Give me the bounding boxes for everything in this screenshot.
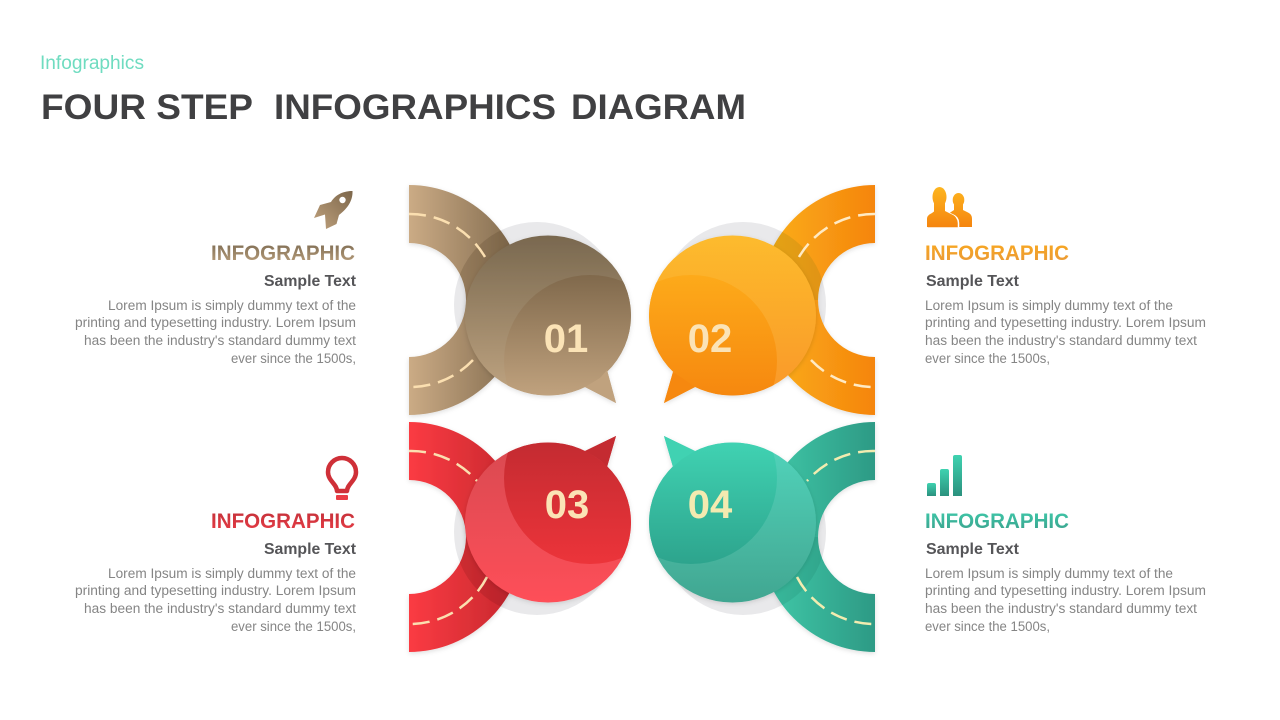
- icon: people: [927, 187, 972, 228]
- text block: step 2: printing and typesetting industry. Lorem Ipsum: [925, 315, 1206, 330]
- number 01: 01: [544, 317, 588, 361]
- text block: step 4: ever since the 1500s,: [925, 619, 1050, 634]
- number 04: 04: [688, 483, 733, 527]
- step 2 graphic: [648, 185, 876, 418]
- text block: step 3: ever since the 1500s,: [231, 619, 356, 634]
- text block: step 3: INFOGRAPHIC: [211, 510, 355, 533]
- text block: step 4: INFOGRAPHIC: [925, 510, 1069, 533]
- text block: step 2: has been the industry's standard dummy text: [925, 333, 1197, 348]
- text block: step 1: ever since the 1500s,: [231, 351, 356, 366]
- text block: step 2: [925, 242, 1206, 366]
- text block: step 1: printing and typesetting industry. Lorem Ipsum: [75, 315, 356, 330]
- text block: step 4: printing and typesetting industry. Lorem Ipsum: [925, 583, 1206, 598]
- icon: rocket: [314, 191, 353, 229]
- text block: step 4: [925, 510, 1206, 634]
- number 02: 02: [688, 317, 732, 361]
- text block: step 4: Sample Text: [926, 541, 1020, 558]
- text block: step 2: Sample Text: [926, 273, 1020, 290]
- title: [41, 87, 746, 127]
- text block: step 2: ever since the 1500s,: [925, 351, 1050, 366]
- text block: step 1: has been the industry's standard dummy text: [84, 333, 356, 348]
- icon: bar chart: [927, 455, 962, 496]
- step 4 graphic: [648, 422, 876, 655]
- icon: light bulb: [328, 458, 356, 500]
- text block: step 3: printing and typesetting industry. Lorem Ipsum: [75, 583, 356, 598]
- text block: step 1: INFOGRAPHIC: [211, 242, 355, 265]
- text block: step 3: Sample Text: [264, 541, 357, 558]
- title: INFOGRAPHICS: [274, 87, 556, 127]
- text block: step 4: Lorem Ipsum is simply dummy text of the: [925, 566, 1173, 581]
- title: DIAGRAM: [571, 87, 746, 127]
- text block: step 1: Sample Text: [264, 273, 357, 290]
- step 1 graphic: [408, 185, 632, 418]
- text block: step 1: [75, 242, 357, 366]
- text block: step 4: has been the industry's standard dummy text: [925, 601, 1197, 616]
- eyebrow label: Infographics: [40, 53, 144, 74]
- text block: step 1: Lorem Ipsum is simply dummy text of the: [108, 298, 356, 313]
- text block: step 3: has been the industry's standard dummy text: [84, 601, 356, 616]
- number 03: 03: [545, 483, 589, 527]
- title: FOUR STEP: [41, 87, 253, 127]
- step 3 graphic: [408, 422, 632, 655]
- text block: step 2: Lorem Ipsum is simply dummy text of the: [925, 298, 1173, 313]
- text block: step 2: INFOGRAPHIC: [925, 242, 1069, 265]
- text block: step 3: [75, 510, 357, 634]
- text block: step 3: Lorem Ipsum is simply dummy text of the: [108, 566, 356, 581]
